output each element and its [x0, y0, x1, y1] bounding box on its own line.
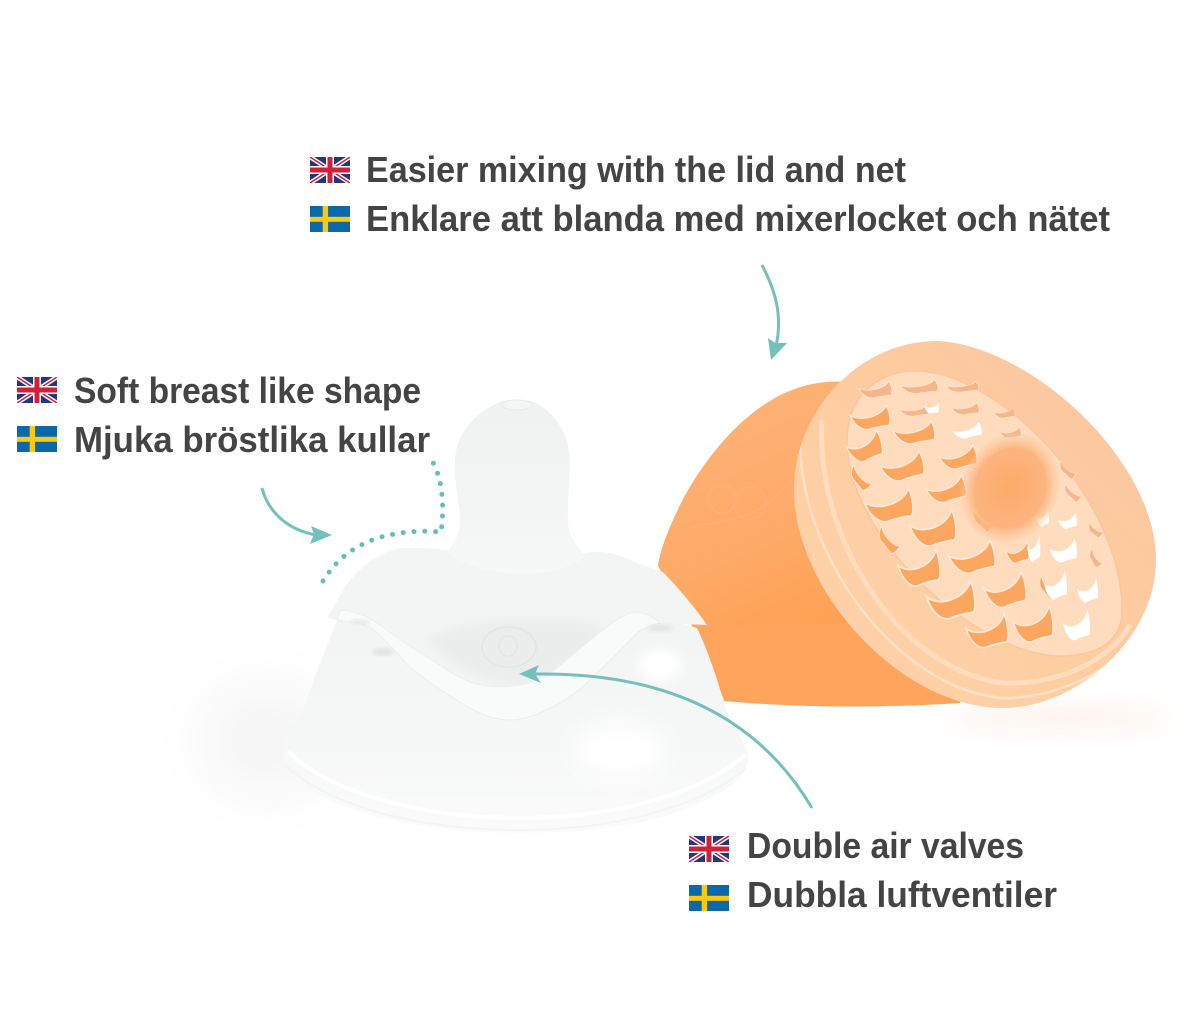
lid rim [794, 341, 1156, 708]
silicone nipple [282, 400, 748, 833]
mixer lid with net [794, 341, 1156, 708]
flag: Sweden [310, 206, 350, 232]
net holes white [923, 400, 1098, 640]
flag: UK [17, 377, 57, 403]
dotted outline of breast shape [323, 459, 443, 581]
arrow: to air valve [519, 665, 812, 808]
teat tip [502, 400, 532, 410]
callout: air valves [689, 825, 1057, 915]
heading: English: Easier mixing with the lid and net [366, 149, 906, 190]
flag: UK [689, 836, 729, 862]
soft highlights and shadows [285, 620, 746, 830]
nipple dome and base [282, 600, 748, 833]
cup flange [696, 622, 960, 707]
heading: Swedish: Mjuka bröstlika kullar [74, 419, 430, 460]
air valve [482, 627, 536, 667]
cup body [658, 382, 1000, 706]
cup logo emboss [690, 480, 790, 528]
callout: mixing with lid and net [310, 149, 1110, 239]
arrow: to nipple shoulder [262, 488, 332, 544]
flag: UK [310, 157, 350, 183]
callout: breast like shape [17, 370, 430, 460]
rim ridges [800, 420, 1135, 698]
heading: Swedish: Dubbla luftventiler [747, 874, 1057, 915]
net holes muted [858, 380, 1104, 568]
net base [847, 371, 1122, 656]
clear lip band [337, 610, 660, 720]
flag: Sweden [17, 426, 57, 452]
lower valley shading [427, 619, 603, 684]
nipple teat [447, 400, 585, 574]
product shadows [200, 685, 1170, 795]
net holes orange [844, 405, 1058, 648]
heading: English: Double air valves [747, 825, 1024, 866]
heading: Swedish: Enklare att blanda med mixerlocket och nätet [366, 198, 1110, 239]
nipple shoulders [327, 548, 707, 720]
heading: English: Soft breast like shape [74, 370, 421, 411]
centre nub [943, 417, 1077, 559]
arrow: to mixer lid [762, 265, 787, 360]
orange mixer cup [658, 382, 1000, 707]
flag: Sweden [689, 885, 729, 911]
